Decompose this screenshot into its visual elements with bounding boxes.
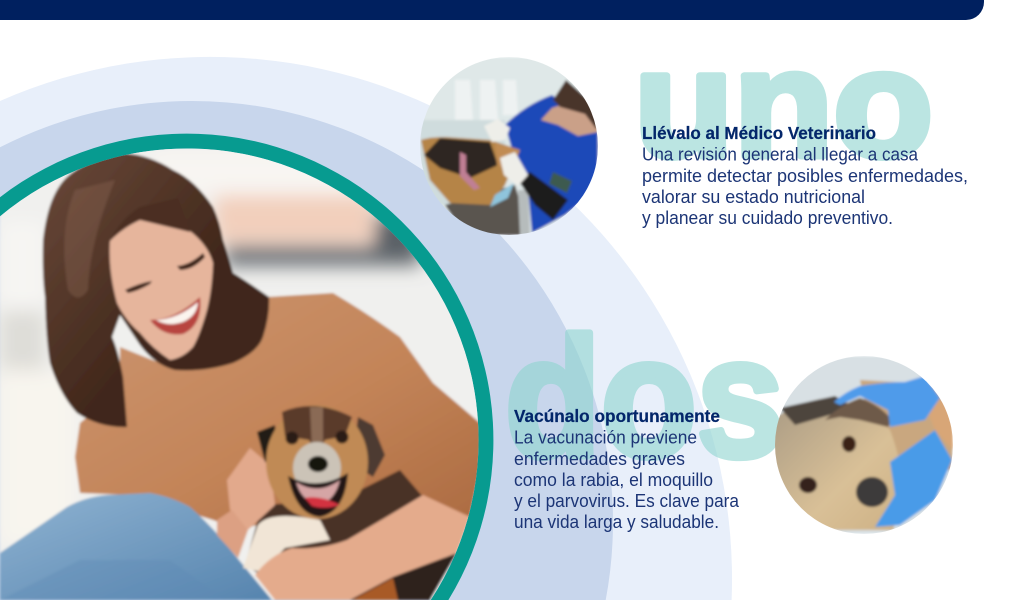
text block: step two: una vida larga y saludable. — [514, 512, 719, 532]
sweater — [75, 293, 480, 530]
table — [445, 185, 530, 235]
text block: step one: permite detectar posibles enfermedades, — [642, 166, 968, 186]
hair — [43, 153, 269, 427]
dog head — [264, 422, 370, 520]
text block: step one: valorar su estado nutricional — [642, 187, 865, 207]
blue scrubs — [505, 95, 598, 233]
main photo: woman with dog — [0, 148, 480, 600]
text block: step two: Vacúnalo oportunamente — [514, 406, 720, 426]
text block: step two: como la rabia, el moquillo — [514, 470, 713, 490]
dog mouth — [288, 473, 348, 517]
big word: uno: uno — [634, 19, 933, 189]
vaccine photo: dog held by gloved hands — [772, 356, 953, 534]
face — [110, 217, 213, 360]
text block: step one — [642, 123, 968, 228]
glove upper — [834, 376, 940, 427]
top navy bar — [0, 0, 984, 20]
text block: step two — [514, 406, 740, 532]
text block: step two: La vacunación previene — [514, 428, 697, 448]
badge — [549, 172, 572, 193]
text block: step two: enfermedades graves — [514, 449, 685, 469]
head — [541, 102, 598, 136]
gloves — [484, 119, 510, 142]
big word: dos: dos — [505, 303, 784, 493]
black sleeve — [518, 172, 568, 220]
dog — [421, 137, 520, 205]
text block: step one: Llévalo al Médico Veterinario — [642, 123, 876, 143]
dog ears — [257, 425, 278, 465]
blue cloth — [490, 183, 514, 207]
hand on dog ear — [227, 448, 275, 530]
glove lower — [875, 430, 952, 527]
vet photo: man examining dog's ear — [420, 57, 600, 235]
text block: step one: y planear su cuidado preventivo. — [642, 208, 893, 228]
dog body — [249, 469, 422, 574]
dog — [772, 397, 903, 530]
background circles — [0, 57, 732, 600]
jeans — [0, 493, 272, 600]
text block: step one: Una revisión general al llegar a casa — [642, 144, 919, 164]
forearm skin — [255, 495, 470, 600]
text block: step two: y el parvovirus. Es clave para — [514, 491, 740, 511]
teal ring around main photo — [0, 134, 493, 600]
